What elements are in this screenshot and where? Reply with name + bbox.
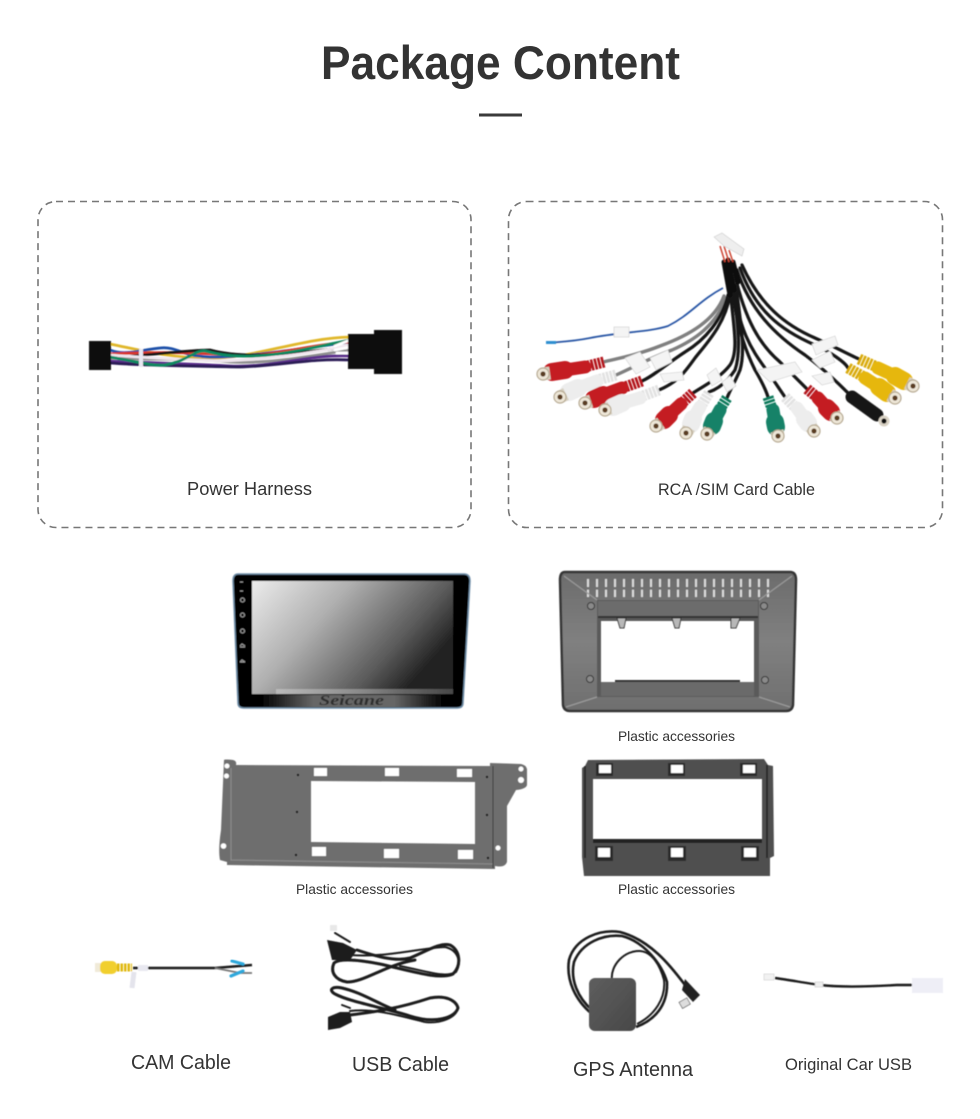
panel: power harness <box>38 202 471 528</box>
image: usb cables <box>327 925 459 1030</box>
label: bracket left: Plastic accessories <box>296 881 413 897</box>
plug: red 3 <box>657 393 693 426</box>
screen reflection strip <box>276 689 453 694</box>
bracket square openings <box>221 764 524 859</box>
plug: green 2 <box>768 397 778 435</box>
plug: yellow 2 <box>848 368 895 398</box>
image: metal bracket left <box>219 760 527 869</box>
side buttons <box>240 582 245 662</box>
label: usb cable: USB Cable <box>352 1054 449 1076</box>
image: original car usb cable <box>764 974 943 993</box>
clips <box>617 618 740 628</box>
title: Package Content <box>321 36 680 89</box>
plug: green 1 <box>708 398 727 433</box>
image: plastic accessories frame <box>560 572 796 711</box>
label: power harness: Power Harness <box>187 479 312 499</box>
brand logo: Seicane <box>319 693 384 709</box>
plug: black audio <box>852 397 890 426</box>
label: plastic accessories frame: Plastic accessories <box>618 728 735 744</box>
image: rca cable bundle <box>537 233 919 442</box>
corner screws <box>586 602 768 684</box>
plug: white 4 <box>785 397 814 431</box>
plug: white 3 <box>687 393 709 432</box>
plug: red 4 <box>807 389 837 418</box>
plug: red 2 <box>585 381 642 403</box>
bottom bezel <box>256 695 448 707</box>
image: head unit display <box>233 574 470 709</box>
label: bracket right: Plastic accessories <box>618 881 735 897</box>
plug: red 1 <box>543 362 604 374</box>
screen <box>252 581 453 694</box>
plug: yellow 1 <box>859 359 913 386</box>
label: original car usb: Original Car USB <box>785 1055 912 1074</box>
plug: white 1 <box>560 375 616 397</box>
image: cam cable <box>95 961 252 988</box>
title underline <box>479 114 522 116</box>
image: gps antenna <box>568 931 700 1031</box>
panel: rca sim card cable <box>508 202 942 528</box>
recess <box>597 600 759 697</box>
ventilation slots <box>588 579 768 597</box>
bracket frames around squares <box>595 763 759 861</box>
label: rca sim card cable: RCA /SIM Card Cable <box>658 481 815 499</box>
cable labels <box>625 336 838 392</box>
image: metal bracket right <box>582 759 774 876</box>
image: power harness cable <box>89 330 402 374</box>
bracket openings <box>598 765 756 857</box>
label: gps antenna: GPS Antenna <box>573 1059 694 1081</box>
plug: white 2 <box>605 390 659 410</box>
label: cam cable: CAM Cable <box>131 1052 231 1074</box>
bracket screw holes <box>295 774 489 859</box>
plug tips <box>537 368 919 442</box>
